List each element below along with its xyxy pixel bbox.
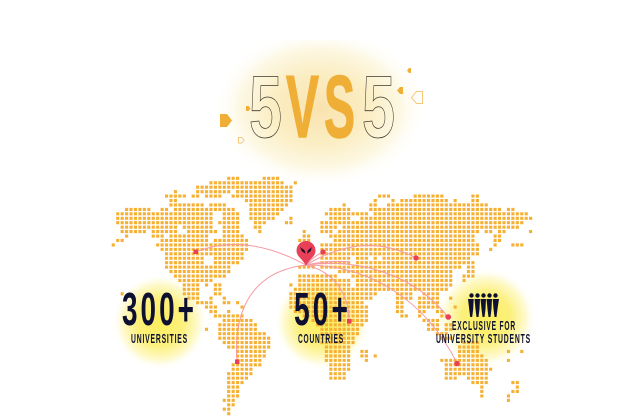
title: 5 VS 5 xyxy=(249,57,395,156)
stat: 50+ countries: COUNTRIES xyxy=(298,332,344,346)
text: exclusive for university students: EXCLUSIVE FOR xyxy=(452,319,516,333)
stat: 300+ universities: 300+ xyxy=(122,283,197,335)
text: exclusive for university students xyxy=(436,319,531,346)
title: 5 VS 5: V xyxy=(286,57,319,156)
glow: students xyxy=(436,268,536,368)
stat: 300+ universities: UNIVERSITIES xyxy=(131,332,188,346)
location markers xyxy=(194,249,460,366)
stat: 300+ universities xyxy=(122,283,197,346)
glow: universities xyxy=(112,274,208,370)
decorative shields xyxy=(220,68,422,143)
dotted world map xyxy=(112,178,534,414)
glow: countries xyxy=(274,274,370,370)
icon: map pin xyxy=(296,241,316,266)
title: 5 VS 5: 5 xyxy=(362,57,395,156)
title: 5 VS 5: 5 xyxy=(249,57,282,156)
connection arcs xyxy=(196,244,457,363)
glow: title xyxy=(227,40,414,177)
icon: group of students xyxy=(468,293,499,317)
text: exclusive for university students: UNIVERSITY STUDENTS xyxy=(436,332,531,346)
title: 5 VS 5: S xyxy=(324,57,355,156)
stat: 50+ countries xyxy=(294,283,351,346)
stat: 50+ countries: 50+ xyxy=(294,283,351,335)
